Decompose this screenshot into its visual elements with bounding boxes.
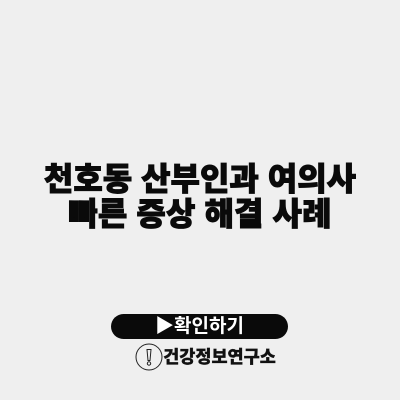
brand name: 건강정보연구소 [163,347,276,367]
button: confirm [111,314,288,339]
title line 1: 천호동 산부인과 여의사 [44,161,356,197]
title [44,161,356,232]
icon: exclamation circle [136,344,162,370]
title line 2: 빠른 증상 해결 사례 [68,196,332,232]
button: confirm: ▶확인하기 [155,316,244,337]
